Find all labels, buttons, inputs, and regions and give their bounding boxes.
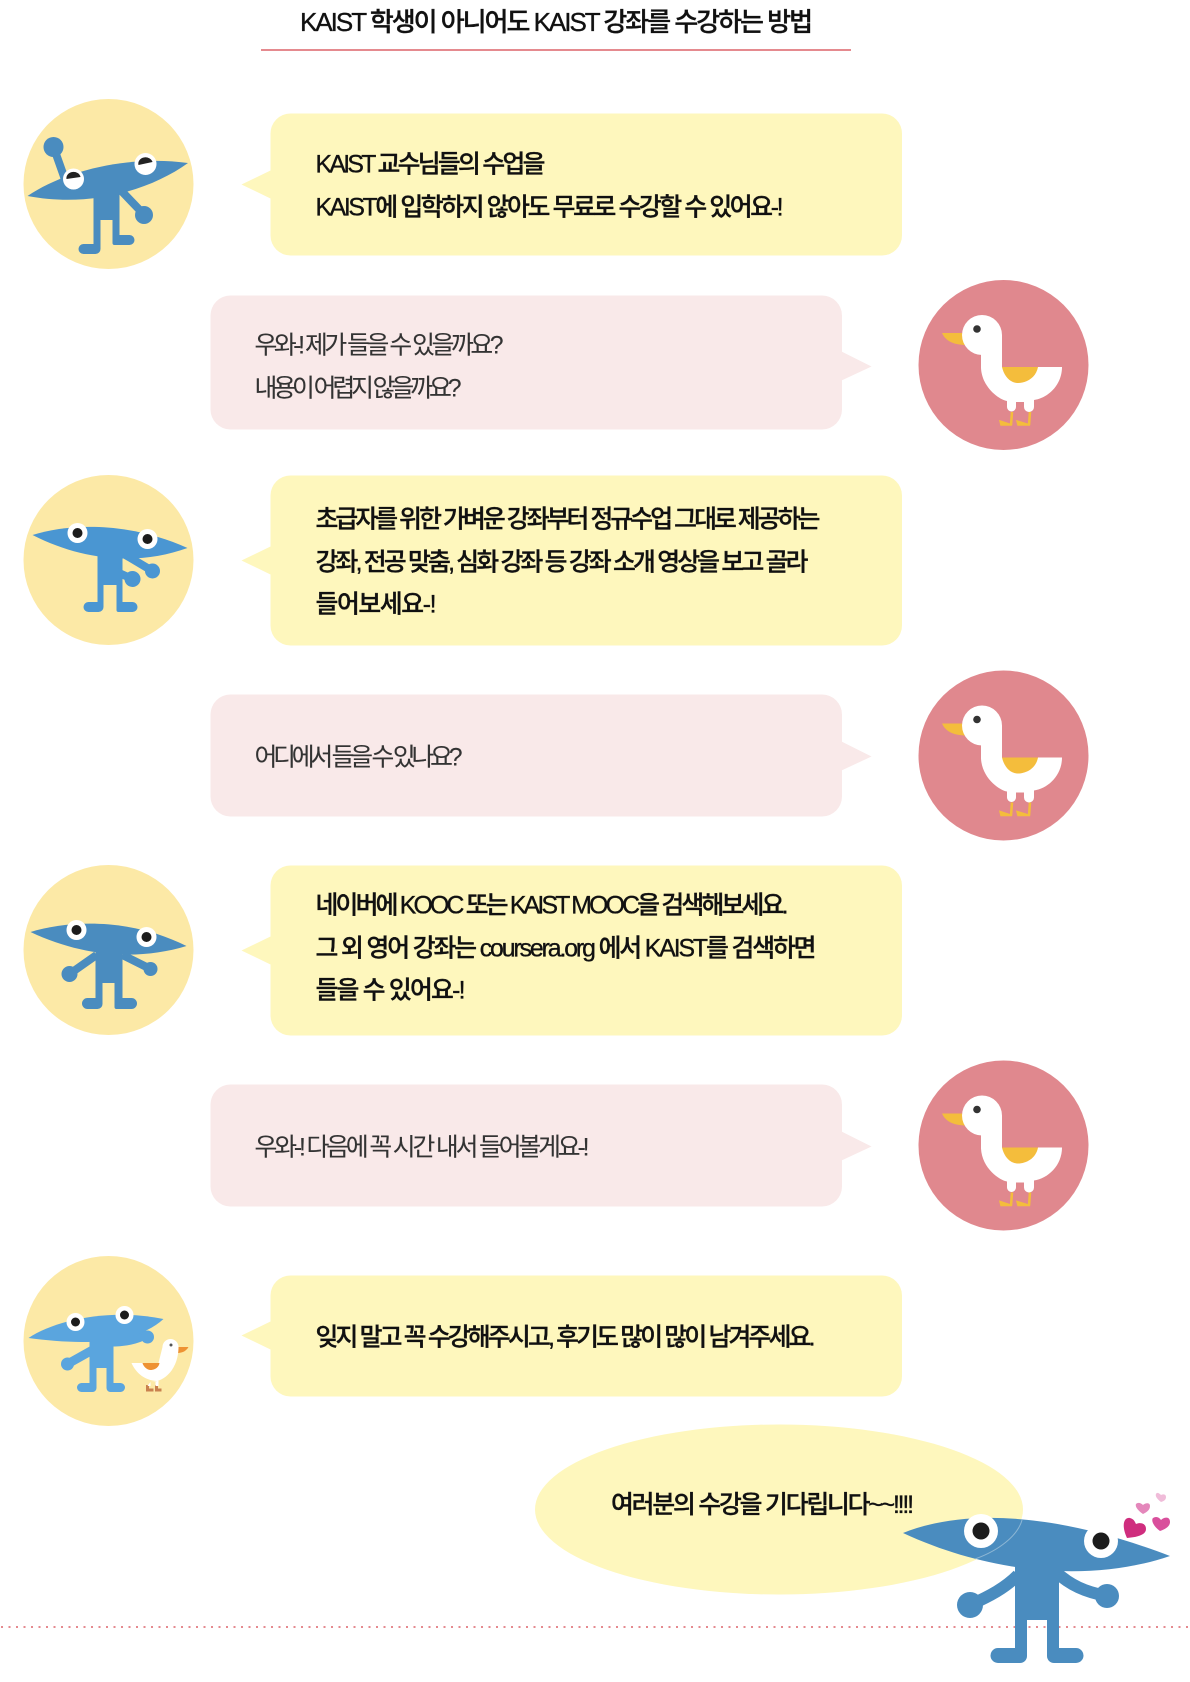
dotted divider bbox=[1, 1626, 1190, 1628]
panel: speech bubble 4 bbox=[210, 694, 872, 816]
icon: duck 2 bbox=[918, 670, 1088, 840]
panel: speech bubble 1: KAIST 교수님들의 수업을 bbox=[316, 150, 546, 178]
panel: speech bubble 1: KAIST에 입학하지 않아도 무료로 수강할 수 있어요-! bbox=[316, 194, 784, 222]
icon: blue character with raised arm bbox=[24, 99, 194, 269]
panel: speech bubble 2: 우와-! 제가 들을 수 있을까요? bbox=[254, 332, 504, 360]
panel: speech bubble 3 bbox=[242, 476, 902, 646]
panel: speech bubble 2: 내용이 어렵지 않을까요? bbox=[254, 374, 462, 402]
icon: large blue character with hearts bbox=[903, 1493, 1170, 1663]
panel: speech bubble 5: 들을 수 있어요-! bbox=[316, 976, 466, 1004]
panel: oval speech bubble bbox=[535, 1424, 1023, 1594]
icon: blue character with arms forward bbox=[24, 475, 194, 645]
icon: duck 1 bbox=[918, 280, 1088, 450]
panel: speech bubble 7: 잊지 말고 꼭 수강해주시고, 후기도 많이 많이 남겨주세요. bbox=[316, 1324, 816, 1352]
panel: speech bubble 4: 어디에서 들을 수 있나요? bbox=[254, 744, 462, 772]
icon: duck 3 bbox=[918, 1060, 1088, 1230]
panel: oval speech bubble: 여러분의 수강을 기다립니다~~!!!! bbox=[611, 1491, 914, 1519]
panel: speech bubble 1 bbox=[242, 114, 902, 256]
panel: speech bubble 6 bbox=[210, 1084, 872, 1206]
title: KAIST 학생이 아니어도 KAIST 강좌를 수강하는 방법 bbox=[300, 7, 813, 37]
icon: blue character with duck bbox=[24, 1256, 194, 1426]
panel: speech bubble 3: 들어보세요-! bbox=[316, 590, 436, 618]
panel: speech bubble 6: 우와-! 다음에 꼭 시간 내서 들어볼게요-! bbox=[254, 1134, 590, 1162]
icon: blue character with arms out bbox=[24, 865, 194, 1035]
panel: speech bubble 3: 강좌, 전공 맞춤, 심화 강좌 등 강좌 소개 영상을 보고 골라 bbox=[316, 548, 809, 576]
panel: speech bubble 2 bbox=[210, 296, 872, 430]
panel: speech bubble 3: 초급자를 위한 가벼운 강좌부터 정규수업 그대로 제공하는 bbox=[316, 506, 820, 534]
panel: speech bubble 5: 네이버에 KOOC 또는 KAIST MOOC을 검색해보세요. bbox=[316, 892, 788, 920]
panel: speech bubble 5: 그 외 영어 강좌는 coursera.org 에서 KAIST를 검색하면 bbox=[316, 934, 816, 962]
panel: speech bubble 5 bbox=[242, 866, 902, 1036]
panel: speech bubble 7 bbox=[242, 1276, 902, 1396]
